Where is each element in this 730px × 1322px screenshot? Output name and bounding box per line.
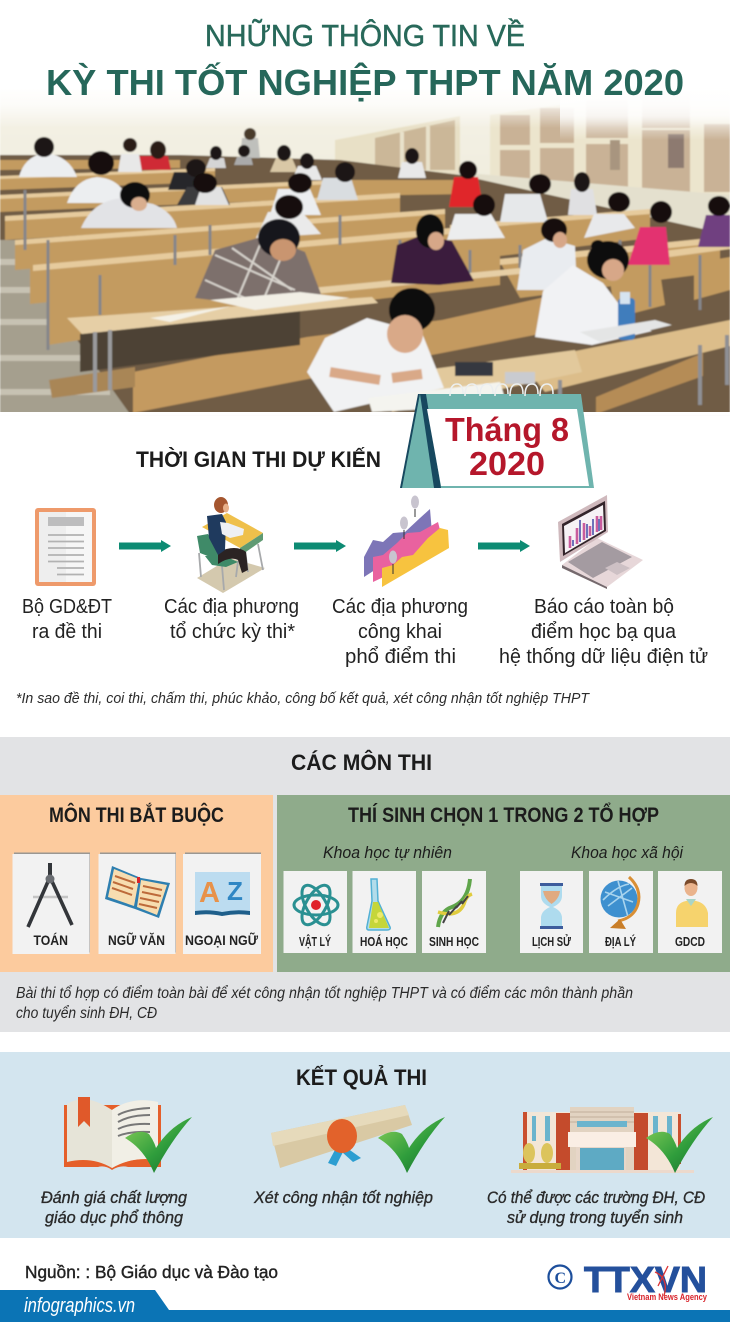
- logo: TTXVN: Vietnam News Agency: [627, 1292, 707, 1302]
- calendar: August 2020: Tháng 8: [445, 411, 569, 448]
- icon: score distribution chart: [364, 496, 449, 587]
- step labels: công khai: [358, 621, 442, 643]
- panel: exam results: [0, 1052, 730, 1238]
- card: civics: [658, 871, 722, 953]
- card: foreign language: NGOẠI NGỮ: [185, 931, 258, 948]
- note: [16, 985, 633, 1022]
- foreground people: [195, 214, 577, 306]
- panel: choose combination: THÍ SINH CHỌN 1 TRONG 2 TỔ HỢP: [348, 803, 659, 827]
- calendar: August 2020: [400, 384, 594, 488]
- heading: results: KẾT QUẢ THI: [296, 1065, 427, 1090]
- icon: student at desk: [197, 497, 265, 593]
- note: cho tuyển sinh ĐH, CĐ: [16, 1005, 157, 1022]
- icon: open book with check: [64, 1097, 192, 1173]
- captions: Xét công nhận tốt nghiệp: [253, 1188, 433, 1207]
- title: [46, 18, 684, 103]
- source: Nguồn: : Bộ Giáo dục và Đào tạo: [25, 1262, 278, 1282]
- step labels: Các địa phương: [164, 596, 299, 618]
- step labels: tổ chức kỳ thi*: [170, 621, 295, 643]
- card: literature: [98, 852, 176, 954]
- step labels: điểm học bạ qua: [531, 621, 677, 643]
- step labels: hệ thống dữ liệu điện tử: [499, 646, 708, 668]
- title: NHỮNG THÔNG TIN VỀ: [205, 18, 525, 53]
- panel: compulsory subjects: [0, 795, 273, 972]
- back row people: [19, 128, 597, 222]
- note: Bài thi tổ hợp có điểm toàn bài để xét công nhận tốt nghiệp THPT và có điểm các môn thành phần: [16, 985, 633, 1002]
- card: biology: [422, 871, 486, 953]
- card: chemistry: HOÁ HỌC: [360, 934, 408, 949]
- step labels: Báo cáo toàn bộ: [534, 596, 674, 618]
- captions: [41, 1188, 705, 1227]
- calendar: August 2020: 2020: [469, 445, 545, 482]
- card: foreign language: A: [199, 877, 220, 909]
- footnote: *In sao đề thi, coi thi, chấm thi, phúc khảo, công bố kết quả, xét công nhận tốt nghiệp THPT: [16, 690, 591, 707]
- panel: compulsory subjects: MÔN THI BẮT BUỘC: [49, 803, 224, 827]
- heading: subjects: CÁC MÔN THI: [291, 750, 432, 775]
- white shirt girl and bottle: [535, 240, 672, 345]
- card: foreign language: [183, 852, 261, 954]
- panel: choose combination: Khoa học tự nhiên: [323, 843, 452, 862]
- step labels: Các địa phương: [332, 596, 468, 618]
- step labels: [22, 596, 708, 668]
- footer bar: [0, 1290, 730, 1322]
- step labels: ra đề thi: [32, 621, 102, 643]
- icon: diploma with check: [271, 1105, 445, 1173]
- card: physics: [284, 871, 347, 953]
- arrow: [294, 540, 346, 552]
- card: history: LỊCH SỬ: [532, 934, 571, 949]
- rows of benches: [0, 160, 730, 345]
- logo: TTXVN: TTXVN: [584, 1259, 707, 1300]
- card: geography: ĐỊA LÝ: [605, 934, 636, 949]
- icon: laptop with chart: [558, 495, 643, 589]
- panel: choose combination: [277, 795, 730, 972]
- footer bar: infographics.vn: [24, 1295, 135, 1317]
- card: biology: SINH HỌC: [429, 934, 479, 949]
- card: literature: NGỮ VĂN: [108, 931, 165, 948]
- arrow: [119, 540, 171, 552]
- icon: exam paper: [35, 508, 96, 586]
- panel: exam subjects: [0, 737, 730, 1032]
- step labels: Bộ GD&ĐT: [22, 596, 112, 618]
- hall base: [0, 155, 730, 414]
- icon: school building with check: [511, 1107, 713, 1173]
- heading: exam time: THỜI GIAN THI DỰ KIẾN: [136, 447, 381, 472]
- card: foreign language: Z: [227, 876, 243, 906]
- captions: Có thể được các trường ĐH, CĐ: [487, 1188, 705, 1207]
- card: civics: GDCD: [675, 934, 705, 949]
- photo: students taking the exam in a lecture hall: [0, 0, 730, 415]
- card: math: TOÁN: [34, 932, 68, 948]
- card: history: [520, 871, 583, 953]
- panel: choose combination: Khoa học xã hội: [571, 843, 684, 862]
- captions: Đánh giá chất lượng: [41, 1188, 188, 1207]
- front girl: [307, 288, 535, 412]
- card: chemistry: [352, 871, 416, 953]
- foreground desks behind people: [133, 297, 545, 413]
- arrow: [478, 540, 530, 552]
- logo: TTXVN: C: [554, 1270, 566, 1287]
- card: physics: VẬT LÝ: [299, 934, 331, 949]
- captions: giáo dục phổ thông: [45, 1208, 184, 1227]
- step labels: phổ điểm thi: [345, 646, 456, 668]
- middle row people: [81, 182, 730, 265]
- card: geography: [589, 871, 653, 953]
- captions: sử dụng trong tuyển sinh: [507, 1208, 683, 1227]
- card: math: [12, 852, 90, 954]
- title: KỲ THI TỐT NGHIỆP THPT NĂM 2020: [46, 61, 684, 103]
